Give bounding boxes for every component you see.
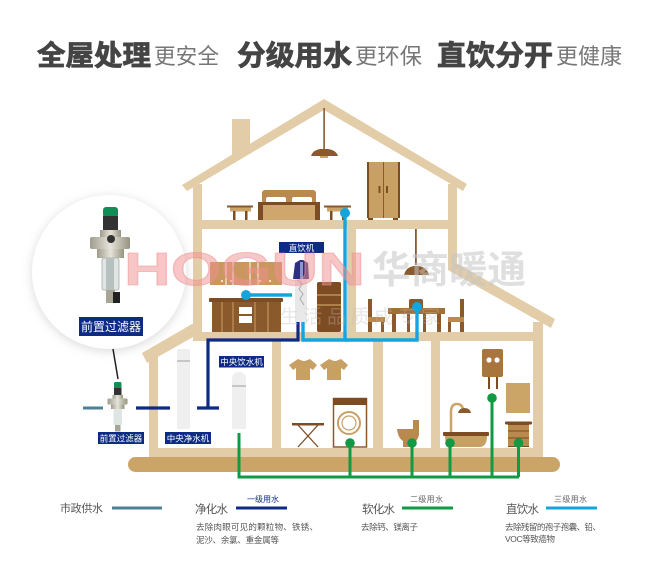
legend: purified water: 泥沙、余氯、重金属等 xyxy=(196,535,279,545)
fridge xyxy=(317,282,341,332)
legend: purified water: 净化水 xyxy=(195,502,228,516)
icon: large pre-filter xyxy=(90,207,130,303)
legend: municipal water xyxy=(60,501,162,515)
central water dispenser xyxy=(232,372,246,429)
label: pre-filter: 前置过滤器 xyxy=(81,319,141,334)
watermark xyxy=(124,243,526,328)
direct drinking machine xyxy=(293,260,309,322)
vanity xyxy=(505,422,532,447)
title: 直饮分开 xyxy=(437,40,553,71)
kitchen counter xyxy=(209,298,283,332)
title: 更安全 xyxy=(154,44,219,69)
bathtub with shower xyxy=(443,404,489,447)
blue drinking water pipes xyxy=(241,208,422,340)
legend: direct drinking water: 三级用水 xyxy=(554,494,587,504)
watermark: HOGUN xyxy=(124,243,365,295)
legend: direct drinking water: 去除残留的孢子孢囊、铅、 xyxy=(505,522,601,532)
foundation xyxy=(128,457,560,472)
watermark: 华商暖通 xyxy=(372,250,526,292)
legend: purified water: 去除肉眼可见的颗粒物、铁锈、 xyxy=(196,522,318,532)
legend: purified water: 一级用水 xyxy=(247,494,279,504)
title: 全屋处理 xyxy=(37,40,151,71)
navy purified water pipes xyxy=(136,322,298,408)
legend: municipal water: 市政供水 xyxy=(60,501,103,515)
title: 分级用水 xyxy=(237,40,352,71)
title xyxy=(37,40,622,71)
label: pre-filter xyxy=(79,317,143,336)
legend: softened water: 软化水 xyxy=(362,502,396,516)
bed xyxy=(258,190,320,220)
antenna line xyxy=(113,349,118,379)
legend: softened water: 二级用水 xyxy=(410,494,443,504)
label: direct drinking machine: 直饮机 xyxy=(289,243,315,253)
legend: direct drinking water xyxy=(505,494,601,544)
bedside tables xyxy=(227,206,351,220)
water heater xyxy=(482,349,503,389)
shirts xyxy=(289,359,348,380)
label: central water purifier: 中央净水机 xyxy=(167,434,210,444)
icon: small pre-filter xyxy=(108,382,128,432)
attic lamp xyxy=(311,108,338,158)
label: central water dispenser: 中央饮水机 xyxy=(220,357,263,367)
toilet xyxy=(397,420,419,447)
green soft water pipes xyxy=(239,393,523,477)
title: 更环保 xyxy=(355,44,422,69)
legend: direct drinking water: 直饮水 xyxy=(506,502,540,516)
washing machine xyxy=(333,398,367,447)
legend: softened water xyxy=(361,494,453,532)
watermark: 生活品质成专家 xyxy=(280,306,440,328)
bathroom mirror xyxy=(506,383,530,413)
central water purifier xyxy=(177,349,190,429)
label: direct drinking machine xyxy=(279,242,324,253)
house structure xyxy=(142,99,555,458)
callout circle: pre-filter xyxy=(32,195,186,351)
legend: softened water: 去除钙、镁离子 xyxy=(361,522,418,532)
wardrobe xyxy=(367,162,400,220)
dining table and chairs xyxy=(368,299,464,332)
legend: purified water xyxy=(195,494,318,545)
ironing table xyxy=(292,423,324,447)
legend: direct drinking water: VOC等致癌物 xyxy=(505,534,555,544)
dining lamp xyxy=(404,229,429,275)
title: 更健康 xyxy=(556,44,622,69)
municipal water pipe xyxy=(83,406,103,410)
label: small pre-filter: 前置过滤器 xyxy=(100,434,143,444)
kitchen upper cabinets xyxy=(210,262,282,285)
